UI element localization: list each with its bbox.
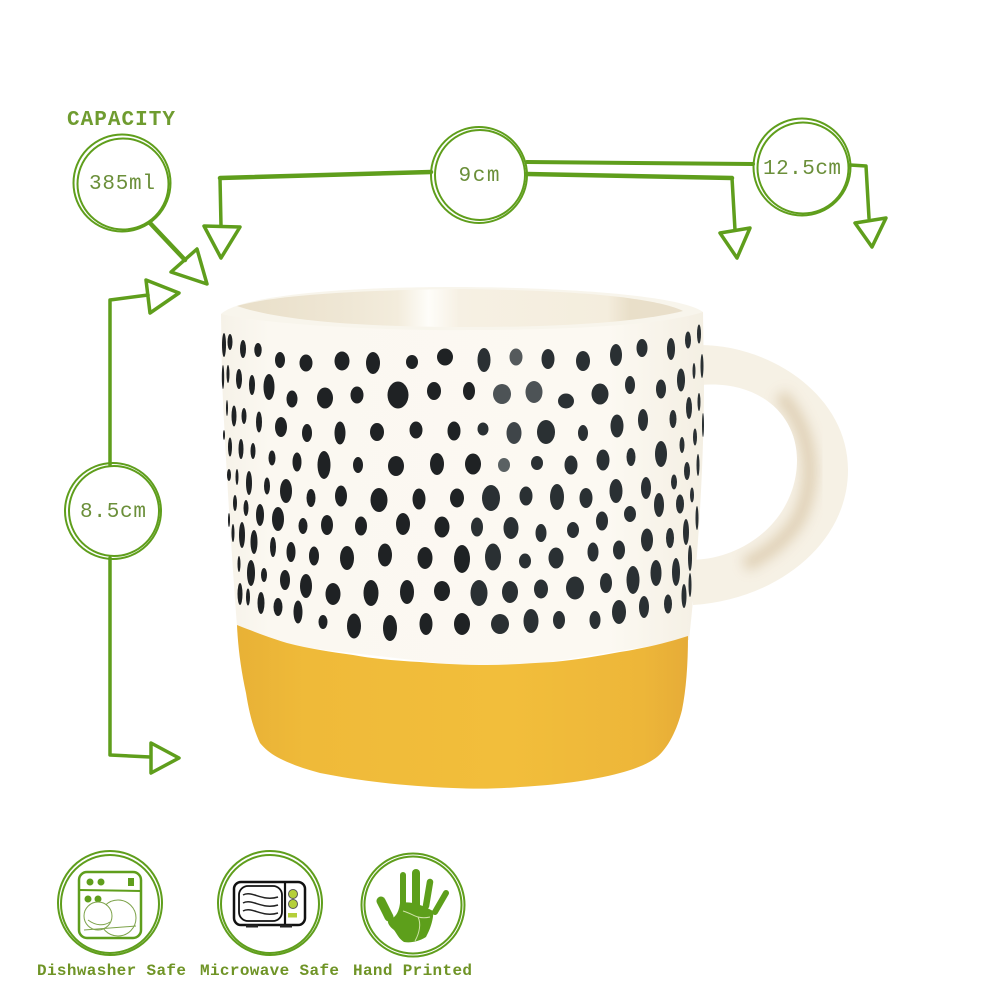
9cm circle: 9cm [458, 165, 500, 188]
width arrow 9cm left [204, 172, 431, 258]
8.5cm circle: 8.5cm [80, 501, 146, 524]
label: microwave safe: Microwave Safe [200, 962, 339, 980]
mug photo [221, 287, 855, 789]
label: dishwasher safe: Dishwasher Safe [37, 962, 186, 980]
line to 12.5cm circle [527, 162, 753, 164]
mug infographic [38, 111, 888, 975]
8.5cm circle [65, 463, 161, 559]
mug white body [221, 312, 704, 670]
icon: dishwasher safe [58, 851, 162, 955]
icon: hand printed [362, 854, 464, 956]
height arrow top [110, 280, 179, 465]
12.5cm arrow [850, 165, 886, 247]
dimension annotations [65, 109, 886, 773]
capacity arrow [150, 223, 207, 284]
icon: microwave safe [218, 851, 322, 955]
mug rim and inside [221, 287, 703, 340]
label: hand printed: Hand Printed [353, 962, 472, 980]
9cm circle [431, 127, 527, 223]
width arrow 9cm right [527, 174, 750, 258]
12.5cm circle: 12.5cm [763, 158, 841, 181]
capacity circle [74, 134, 170, 232]
mug yellow base [237, 625, 688, 789]
mug black dots [222, 333, 481, 641]
height arrow bottom [110, 558, 179, 773]
mug handle [690, 340, 855, 610]
12.5cm circle [754, 118, 850, 216]
capacity heading: CAPACITY [67, 109, 175, 132]
capacity circle: 385ml [89, 173, 155, 196]
